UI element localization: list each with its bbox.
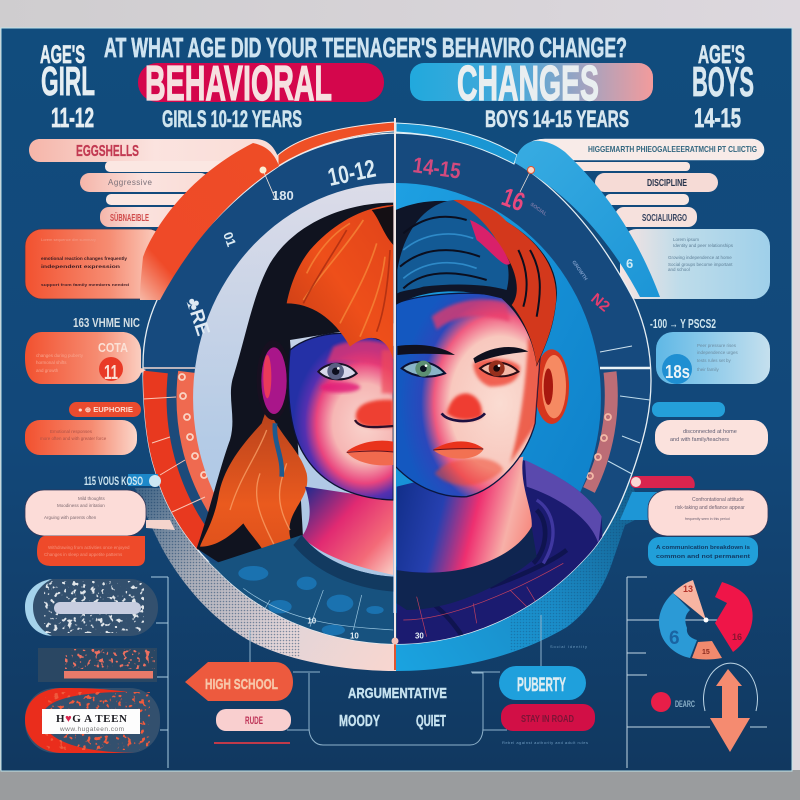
boy hair — [396, 200, 557, 367]
text box: 18s: Peer pressure rises — [697, 343, 737, 348]
text box: pale: Arguing with parents often — [44, 515, 97, 520]
boy hoodie — [397, 460, 603, 663]
girl face shading — [320, 340, 395, 393]
text box: light blue: and school — [668, 267, 690, 272]
small captions — [502, 644, 588, 745]
pill: socializing — [615, 207, 697, 227]
words: argumentative: ARGUMENTATIVE — [348, 685, 447, 702]
pie chart: 16 — [732, 632, 742, 642]
text box: red — [37, 536, 145, 566]
ring age labels: 16 — [498, 181, 529, 217]
text box: orange: Lorem sequence dim summary — [41, 237, 96, 242]
pill: stay in road — [501, 704, 595, 731]
text box: light blue — [620, 229, 770, 299]
ring age labels: 14-15 — [411, 152, 462, 184]
pie chart: 6 — [669, 628, 680, 649]
portrait: boy: 30 — [415, 631, 424, 640]
girl bangs — [287, 205, 393, 360]
logo: H♥G A TEEN — [56, 713, 127, 725]
pill: rude — [216, 709, 291, 731]
red dot with label: DEARC — [675, 699, 695, 709]
words: moody: MOODY — [339, 713, 380, 730]
small captions: Rebel against authority and adult rules — [502, 740, 588, 745]
girl face — [288, 333, 393, 500]
text box: pale lower: risk-taking and defiance appear — [675, 505, 745, 511]
text box: orange: independent expression — [41, 264, 120, 269]
boy shirt — [397, 527, 537, 610]
left age heading: 11-12 — [51, 102, 94, 133]
bottom left: timeline bracket — [151, 577, 168, 768]
boy face — [396, 293, 540, 497]
boy nose — [442, 393, 485, 421]
text box: pale: Mild thoughts — [78, 496, 106, 501]
text box: cota: hormonal shifts — [36, 360, 67, 365]
boy left eye — [402, 361, 445, 377]
text box: cota: COTA — [98, 340, 129, 355]
ring age labels: ♣RE — [181, 295, 213, 339]
boy right eye — [480, 360, 518, 376]
pill: eggshells: EGGSHELLS — [76, 143, 139, 160]
ring age labels: N2 — [587, 290, 613, 315]
girl ear — [261, 347, 287, 420]
text box: pale lower: frequently seen in this period — [685, 517, 730, 521]
text box: pale lower: Confrontational attitude — [692, 497, 744, 503]
portrait split face — [190, 200, 603, 663]
ring age labels: 01 — [220, 230, 239, 249]
text box: pale — [25, 490, 175, 536]
pill: puberty — [499, 666, 586, 700]
boy mouth — [433, 441, 483, 459]
text box: light blue: Growing independence at home — [668, 255, 732, 260]
text box: blue: common and not permanent — [656, 554, 750, 560]
right pills group — [515, 139, 770, 299]
girl sweater — [208, 535, 394, 644]
pill: submissible — [100, 207, 180, 227]
text box: salmon: Emotional responses — [50, 429, 93, 434]
ring age labels: 180 — [272, 188, 294, 203]
pill: long header — [515, 139, 764, 160]
small red pill — [69, 402, 141, 417]
label: 100: -100 → Y PSCS2 — [650, 317, 716, 331]
ring divider: left — [143, 367, 195, 369]
banner: changes — [410, 57, 653, 111]
wedge: salmon top — [673, 580, 706, 620]
text box: pale — [655, 420, 768, 455]
thick arc: blue — [515, 141, 660, 297]
striped band: right navy — [587, 346, 650, 490]
pill: stay in road: STAY IN ROAD — [521, 714, 574, 725]
small captions: Social identity — [550, 644, 587, 649]
left pills group — [25, 139, 280, 299]
pill: aggressive — [80, 173, 210, 192]
boy face shading — [432, 299, 542, 485]
portrait: girl — [190, 203, 395, 663]
red dot with label — [651, 692, 695, 712]
striped band: left red — [143, 372, 218, 545]
left age heading — [40, 41, 95, 133]
logo: www.hugateen.com — [59, 726, 124, 733]
banner: changes: CHANGES — [457, 57, 599, 111]
text box: pale: disconnected at home — [683, 429, 737, 435]
center divider — [392, 118, 398, 670]
text box: cota: changes during puberty — [36, 353, 84, 358]
blue pill — [652, 402, 725, 417]
swoosh: top left orange — [278, 122, 395, 166]
wedge: red — [715, 582, 753, 652]
bottom right: timeline bracket — [627, 577, 720, 768]
text box: 18s: tests rules set by — [697, 358, 732, 363]
girl nose — [355, 400, 393, 427]
text box: salmon — [25, 420, 137, 455]
portrait: girl: 10 — [350, 631, 359, 640]
wedge: blue donut — [659, 593, 697, 658]
text box: cota: 11 — [104, 362, 118, 384]
text box: orange: support from family members needed — [41, 282, 130, 287]
girl mouth — [347, 441, 393, 465]
pill: socializing: SOCIALIURGO — [642, 213, 687, 224]
left age heading: AGE'S — [40, 41, 85, 69]
words: quiet: QUIET — [416, 713, 446, 730]
subheading: girls: GIRLS 10-12 YEARS — [162, 106, 302, 133]
text box: light blue: Lorem ipsum — [673, 237, 699, 242]
icon: up-down arrow — [704, 663, 767, 752]
right age heading — [692, 41, 754, 133]
text box: pale lower — [648, 490, 768, 536]
ring age labels: 6 — [626, 256, 633, 271]
small red pill: ● ⊕ EUPHORIE — [78, 407, 133, 414]
ring band: lower right — [396, 480, 645, 671]
text box: red: Withdrawing from activities once enjoyed — [48, 545, 130, 550]
text box: red: Changes in sleep and appetite patterns — [44, 552, 123, 557]
text box: cota: and growth — [36, 368, 59, 373]
text box: blue — [648, 537, 758, 566]
portrait: girl: 10 — [307, 616, 317, 625]
pill: long header: HIGGEMARTH PHIEOGALEEERATMCHI PT CLIICTIG — [588, 144, 757, 154]
girl lower hair — [200, 414, 308, 548]
right age heading: AGE'S — [698, 41, 745, 69]
arrow label: high school: HIGH SCHOOL — [205, 676, 278, 693]
ring age labels: 10-12 — [325, 155, 378, 192]
text box: cota — [25, 332, 146, 384]
pill: rude: RUDE — [245, 715, 263, 727]
text box: 18s: 18s — [665, 362, 690, 382]
bottom left: distressed pill three — [25, 688, 160, 753]
boy ear — [534, 349, 569, 424]
pill: discipline: DISCIPLINE — [647, 178, 687, 189]
connector dots — [260, 166, 534, 198]
girl eye — [318, 363, 357, 380]
central ring — [135, 122, 660, 671]
red pill — [630, 476, 695, 488]
text box: 18s: independence urges — [697, 350, 739, 355]
wedge: salmon bottom — [692, 641, 722, 660]
pill: aggressive: Aggressive — [108, 178, 153, 187]
inner disc left — [193, 183, 396, 613]
arrow label: high school — [185, 662, 293, 701]
red caption line — [214, 742, 290, 744]
ring age labels: SOCIAL — [529, 202, 548, 217]
girl neck — [302, 487, 393, 575]
label: 115: 115 VOUS KOSO — [84, 474, 143, 488]
text box: blue: A communication breakdown is — [656, 545, 750, 551]
pie chart: 15 — [702, 649, 710, 656]
text box: 18s — [656, 332, 770, 384]
bottom center connectors — [250, 615, 541, 745]
right age heading: 14-15 — [694, 103, 741, 133]
portrait: boy — [396, 200, 603, 663]
boy eyebrows — [397, 345, 528, 363]
thick arc: orange — [140, 143, 279, 300]
ring age labels: GROWTH — [570, 260, 589, 282]
banner: behavioral: BEHAVIORAL — [145, 57, 332, 111]
ring base — [143, 133, 651, 644]
blue tab — [620, 492, 660, 520]
bottom left: distressed pill one — [25, 579, 158, 636]
text box: pale: and with family/teachers — [670, 437, 729, 443]
text box: orange — [25, 229, 165, 299]
ring band: lower left — [135, 488, 396, 671]
text box: salmon: more often and with greater force — [40, 436, 107, 441]
left age heading: GIRL — [41, 58, 95, 104]
bottom left: distressed bar two — [38, 648, 157, 682]
text box: light blue: Identity and peer relationships — [673, 243, 734, 248]
subheading: boys: BOYS 14-15 YEARS — [485, 106, 629, 133]
swoosh: top right blue — [396, 123, 517, 164]
text box: light blue: Social groups become important — [668, 262, 733, 267]
text box: pale: Moodiness and irritation — [57, 503, 105, 508]
ring age labels — [181, 152, 633, 339]
logo — [42, 709, 140, 734]
inner disc right — [396, 183, 601, 613]
pie chart — [659, 580, 753, 660]
pill: submissible: SÜBNAEIBLE — [110, 211, 149, 224]
pill: puberty: PUBERTY — [517, 675, 566, 696]
text box: 18s: their family — [697, 367, 720, 372]
text box: orange: emotional reaction changes frequently — [41, 256, 128, 261]
pie chart: 13 — [683, 584, 693, 594]
pill: discipline — [595, 173, 718, 192]
pill: eggshells — [29, 139, 280, 162]
boy neck — [397, 457, 532, 573]
label: 163: 163 VHME NIC — [73, 315, 140, 330]
right column: mid section — [620, 317, 770, 566]
left column: mid section — [25, 315, 175, 566]
